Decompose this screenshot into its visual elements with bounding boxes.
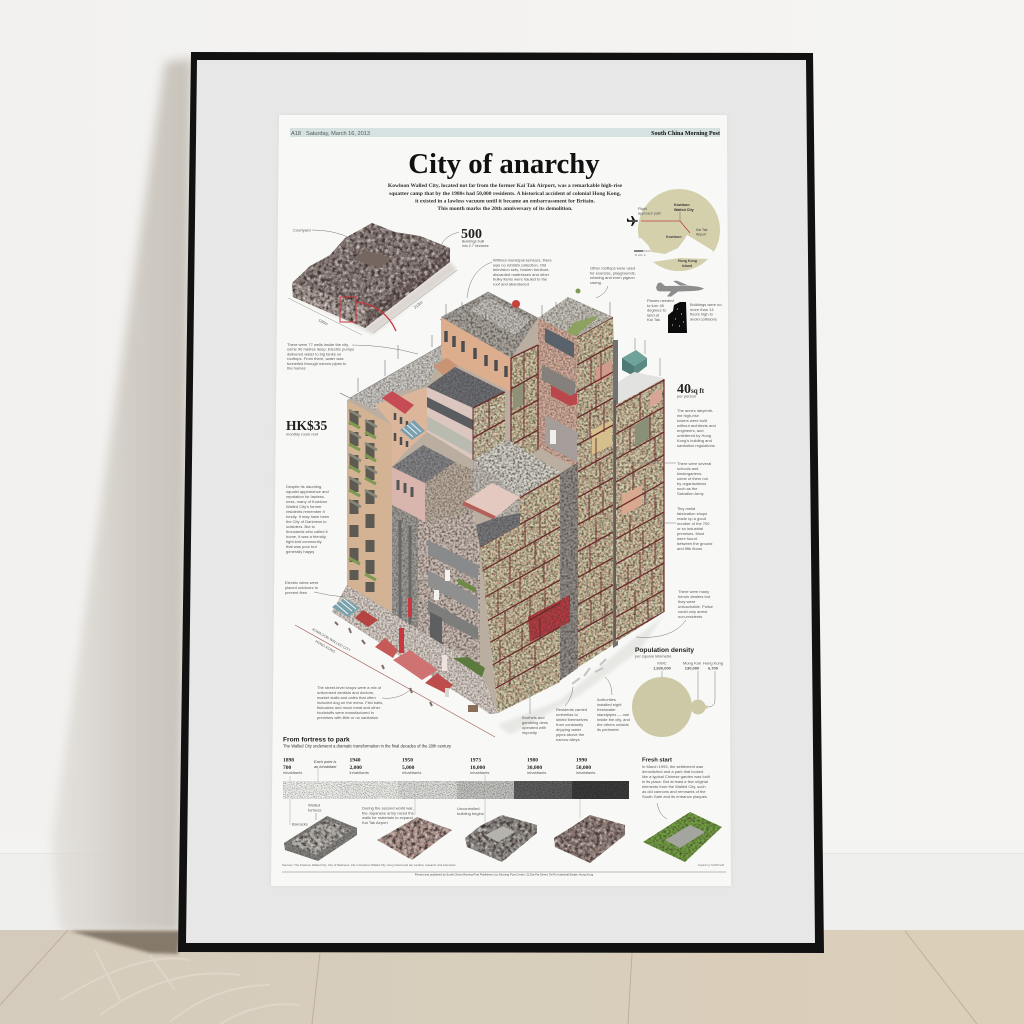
- note: community: reputation for lawless-: [286, 494, 326, 499]
- stat: 40 sq ft: 40: [677, 382, 691, 397]
- aerial block illustration: [288, 223, 457, 335]
- brick peach corner: [433, 358, 458, 376]
- note: towers: Kong's building and: [677, 438, 712, 443]
- fresh start text: elements from the Walled City, such: [642, 784, 706, 789]
- note: metal shops: between the ground: [677, 541, 712, 546]
- note: heroin dealers: untouchable. Police: [678, 604, 714, 609]
- left rooftop parapet: [350, 345, 442, 410]
- note: umbrellas: [556, 687, 588, 742]
- note: wells: funnelled through narrow pipes to: [287, 361, 347, 366]
- stat: 500 buildings: [441, 227, 489, 248]
- note: towers: without architects and: [677, 423, 716, 428]
- population density chart: 130,000: [685, 666, 700, 670]
- timeline labels: 5,000: [402, 765, 415, 771]
- cutaway cells: upper small: [473, 392, 505, 460]
- red locator square and arc: [340, 297, 396, 331]
- block stage 1990: [554, 815, 625, 863]
- note: building height limit: avoid collisions: [690, 316, 717, 321]
- intro paragraph: it existed in a lawless vacuum until it became an embarrassment for Britain.: [415, 198, 595, 204]
- street-level shops and awnings: [332, 585, 498, 714]
- population density chart: 1,930,000: [653, 666, 672, 670]
- note: umbrellas: from constantly: [556, 722, 583, 727]
- locator map: Kowloon: [674, 203, 690, 207]
- timeline labels: 1990: [576, 758, 587, 764]
- note: metal shops: [656, 506, 712, 551]
- dark grey tin roof block: [427, 367, 505, 460]
- note: umbrellas: umbrellas to: [556, 712, 579, 717]
- note: metal shops: Tiny metal: [677, 506, 695, 511]
- locator map: Airport: [696, 232, 706, 236]
- locator map: [627, 188, 722, 275]
- mid grey-roof block: [392, 439, 560, 547]
- fresh start text: South Gate and its entrance plaques: [642, 794, 707, 799]
- note: rooftop rubbish: bulky items were hauled to the: [493, 276, 548, 282]
- note: schools: such as the: [677, 486, 698, 491]
- note: rooftop rubbish: television sets, broken furniture,: [493, 267, 549, 272]
- note: wells: the homes: [287, 366, 306, 370]
- note: street-level shops: The street-level shops were a mix of: [317, 685, 382, 690]
- note: metal shops: number of the 700: [677, 521, 710, 526]
- note: towers: ine high-rise: [677, 413, 700, 418]
- note: metal shops: fabrication shops: [677, 511, 707, 516]
- timeline labels: 30,000: [527, 765, 542, 771]
- note: towers: unfettered by Hong: [677, 433, 711, 438]
- note: standpipes: the others outside: [597, 722, 630, 727]
- wooden floor: [0, 930, 1024, 1024]
- facade: rear left tower: [441, 317, 511, 392]
- note: schools: schools and: [677, 466, 698, 471]
- gap between towers: [613, 340, 618, 648]
- note: rooftop rubbish: roof and abandoned: [493, 281, 529, 286]
- note: electric wires: Electric wires were: [285, 580, 319, 585]
- note: community: home, it was a friendly,: [286, 534, 327, 539]
- fresh start text: In March 1993, the settlement was: [642, 764, 703, 769]
- block stage 1973: building begins: [457, 811, 484, 816]
- title: City of anarchy: [408, 148, 600, 180]
- note: standpipes: Authorities: [597, 697, 616, 702]
- timeline labels: inhabitants: [576, 770, 595, 775]
- timeline labels: inhabitants: [470, 770, 489, 775]
- note: community: tight-knit community: [286, 539, 322, 544]
- header band: South China Morning Post: [651, 131, 720, 137]
- rear towers rooftops: [440, 288, 613, 358]
- boundary lines and labels: HONG KONG: [314, 639, 336, 654]
- note: street-level shops: unlicensed dentists and doctors,: [317, 690, 374, 695]
- locator map: 0 km 1: [635, 253, 646, 257]
- header band: [290, 128, 720, 137]
- note: community: squalid appearance and: [286, 489, 329, 494]
- pink middle block: [375, 387, 427, 467]
- locator map: Kowloon: [666, 235, 682, 239]
- bubble circles: [632, 671, 715, 737]
- note: rooftops use: [590, 266, 636, 298]
- locator map: Flight: [638, 207, 647, 211]
- block stage 1973: Uncontrolled: [457, 806, 479, 811]
- timeline labels: 2,000: [350, 765, 362, 771]
- note: towers: The area's labyrinth-: [677, 408, 714, 413]
- block stage 1973: [457, 806, 537, 862]
- note: umbrellas: pipes above the: [556, 732, 585, 737]
- sources and footer: Sources: The Kowloon Walled City; City of Darkness: Life in Kowloon Walled City; Greg Girard and Ian Lambot; research and interviews: [282, 863, 456, 867]
- note: schools: Salvation Army: [677, 491, 704, 496]
- note: street-level shops: foodstuffs were manufactured in: [317, 710, 374, 715]
- note: schools: [632, 461, 711, 496]
- boundary lines and labels: [295, 625, 495, 737]
- note: community: generally happy: [286, 549, 314, 554]
- stat: 40 sq ft: sq ft: [691, 387, 705, 395]
- note: community: thousands who called it: [286, 529, 328, 534]
- block stage 1898: fortress: [308, 808, 321, 812]
- skirting board: [0, 839, 1024, 931]
- timeline labels: 50,000: [576, 765, 591, 771]
- scattered debris at base: [572, 659, 606, 684]
- note: community: Despite its daunting,: [286, 484, 322, 489]
- section heading: from fortress to park: From fortress to park: [283, 736, 350, 744]
- note: community: that was poor but: [286, 544, 318, 549]
- icon: grey airliner: [656, 281, 704, 297]
- timeline labels: an inhabitant: [314, 764, 337, 769]
- note: standpipes: installed eight: [597, 702, 622, 707]
- lower facade with balconies and laundry: [392, 505, 480, 702]
- locator map: Island: [682, 264, 692, 268]
- note: wells: rooftops. From there, water was: [287, 356, 343, 361]
- note: metal shops: and fifth floors: [677, 546, 702, 551]
- note: wells: There were 77 wells inside the city,: [287, 342, 349, 347]
- note: heroin dealers: they were: [678, 599, 696, 604]
- timeline labels: inhabitants: [527, 770, 546, 775]
- note: rooftop rubbish: [467, 258, 552, 298]
- note: electric wires: prevent fires: [285, 590, 307, 595]
- population dot density strip: [283, 768, 629, 826]
- note: towers: sanitation regulations: [677, 443, 715, 448]
- note: rooftops use: for exercise, playgrounds,: [590, 270, 636, 275]
- intro paragraph: Kowloon Walled City, located not far from the former Kai Tak Airport, was a remarkable high-rise: [388, 183, 623, 189]
- cutaway cells: lower block: [480, 473, 570, 713]
- cutaway cells: middle tower: [577, 317, 613, 668]
- courtyard label: [293, 228, 352, 239]
- note: schools: There were several: [677, 461, 711, 466]
- stat: 500 buildings: 500: [461, 227, 482, 242]
- note: heroin dealers: heroin dealers but: [678, 594, 711, 599]
- timeline labels: 1898: [283, 758, 294, 764]
- note: rooftop rubbish: discarded mattresses and other: [493, 272, 550, 277]
- timeline labels: 700: [283, 765, 292, 771]
- stat: 500 buildings: Buildings built: [462, 240, 484, 244]
- locator map: Walled City: [674, 208, 695, 212]
- note: rooftop rubbish: Without municipal services, there: [493, 258, 552, 262]
- timeline labels: 10,000: [470, 765, 485, 771]
- header band: A18: [291, 131, 301, 137]
- timeline labels: inhabitants: [350, 770, 369, 775]
- note: umbrellas: dripping water: [556, 727, 582, 732]
- block stage 1950: [362, 806, 452, 860]
- note: standpipes: freshwater: [597, 707, 616, 712]
- cutaway cells: rear left tower: [511, 345, 538, 470]
- note: brothels: impunity: [522, 730, 537, 735]
- fresh start text: [642, 758, 711, 799]
- locator map: Kai Tak: [696, 228, 708, 232]
- faded pale street ground: [498, 615, 664, 735]
- note: planes: to turn 45: [647, 303, 665, 308]
- note: rooftop rubbish: was no rubbish collection. Old: [493, 262, 546, 267]
- population density chart: Population density: [635, 647, 694, 654]
- note: towers: engineers, and: [677, 428, 703, 433]
- note: community: fondly. It may have been: [286, 514, 329, 519]
- population density chart: per square kilometre: [635, 654, 672, 658]
- note: heroin dealers: [636, 589, 714, 637]
- stat: 40 sq ft: per person: [677, 394, 696, 398]
- locator map: approach path: [638, 212, 661, 216]
- note: towers: towers were built: [677, 418, 708, 423]
- block stage 1950: walls for materials to expand: [362, 815, 413, 820]
- note: street-level shops: market stalls and cafes that often: [317, 695, 376, 700]
- header band: Saturday, March 16, 2013: [306, 131, 370, 137]
- sources and footer: Printed and published by South China Morning Post Publishers Ltd, Morning Post Centre, 22 Dai Fat Street, Tai Po Industrial Estate, Hong Kong: [415, 872, 594, 876]
- note: schools: some of them run: [677, 476, 708, 481]
- right tower roof: [618, 372, 664, 405]
- service alley: [558, 462, 578, 682]
- stat: monthly rent: monthly room rent: [286, 432, 319, 436]
- timeline labels: [283, 758, 595, 775]
- population density chart: Mong Kok: [683, 660, 701, 666]
- note: wells: delivered water to big tanks on: [287, 351, 341, 356]
- fresh start text: in its place. But at least a few original: [642, 779, 708, 784]
- block stage park: [643, 803, 722, 862]
- note: schools: by organisations: [677, 481, 706, 486]
- note: community: the City of Darkness to: [286, 519, 327, 524]
- intro paragraph: squatter camp that by the 1980s had 50,000 residents. A historical accident of colonial Hong Kong,: [389, 191, 622, 197]
- section heading: from fortress to park: The Walled City underwent a dramatic transformation in the final decades of the 20th century: [283, 744, 452, 748]
- boundary lines and labels: KOWLOON WALLED CITY: [312, 627, 352, 653]
- note: heroin dealers: There were many: [678, 589, 709, 594]
- timeline labels: 1940: [350, 758, 361, 764]
- block stage 1950: the Japanese army razed the: [362, 810, 415, 815]
- note: brothels: [522, 680, 548, 735]
- base silhouette: [332, 292, 664, 714]
- facade: rear middle tower: [538, 318, 577, 468]
- note: community: Walled City's former: [286, 504, 322, 509]
- block stage 1898: [284, 802, 357, 861]
- note: heroin dealers: could only arrest: [678, 609, 708, 614]
- sources and footer: [282, 863, 726, 876]
- note: standpipes: inside the city, and: [597, 717, 630, 722]
- note: brothels: operated with: [522, 725, 546, 730]
- green rooftop shack: [622, 338, 660, 376]
- timeline labels: Each point is: [314, 759, 336, 764]
- note: metal shops: were found: [677, 536, 697, 541]
- note: street-level shops: premises with little or no sanitation: [317, 715, 378, 720]
- note: street-level shops: fishcakes and mock meat and other: [317, 705, 381, 710]
- left tan facade with balconies: [347, 400, 392, 612]
- timeline labels: 1973: [470, 758, 481, 764]
- note: planes: degrees to: [647, 308, 667, 313]
- timeline labels: 1980: [527, 758, 538, 764]
- locator map: Hong Kong: [678, 259, 697, 263]
- timeline labels: inhabitants: [402, 770, 421, 775]
- stat: monthly rent: HK$35: [286, 418, 328, 433]
- aerial block illustration: 213m: [413, 299, 424, 310]
- note: electric wires: [285, 580, 345, 597]
- note: planes: land at: [647, 312, 660, 317]
- fresh start text: like a typical Chinese garden was built: [642, 774, 711, 779]
- note: standpipes: its perimeter: [597, 727, 620, 732]
- note: umbrellas: Residents carried: [556, 707, 587, 712]
- frame shadow on wall: [52, 58, 192, 932]
- note: brothels: gambling dens: [522, 720, 548, 725]
- intro paragraph: This month marks the 20th anniversary of its demolition.: [437, 206, 573, 212]
- note: standpipes: [597, 677, 630, 732]
- note: community: residents remember it: [286, 509, 326, 514]
- note: building height limit: more than 14: [690, 307, 714, 312]
- note: metal shops: or so industrial: [677, 526, 703, 531]
- note: rooftops use: relaxing and even pigeon: [590, 275, 635, 280]
- block stage 1950: During the second world war,: [362, 806, 414, 810]
- stat: 500 buildings: into 2.7 hectares: [462, 244, 489, 248]
- population density chart: Hong Kong: [703, 660, 723, 666]
- note: metal shops: made up a good: [677, 516, 706, 521]
- icon: black building silhouette: [668, 302, 687, 333]
- population density chart: 6,700: [708, 666, 719, 670]
- fresh start text: as old cannons and remnants of the: [642, 789, 706, 794]
- note: wells: some 90 metres deep. Electric pumps: [287, 347, 354, 352]
- note: street-level shops: included dog on the menu. Fish balls,: [317, 700, 383, 705]
- section heading: from fortress to park: [283, 736, 452, 748]
- note: standpipes: standpipes — one: [597, 712, 630, 717]
- sources and footer: Graphic by SCMP staff: [698, 863, 724, 867]
- main cutaway building illustration: [332, 288, 664, 735]
- note: community: ness, many of Kowloon: [286, 499, 327, 504]
- cutaway cells: right tower: [615, 379, 664, 642]
- note: planes: Planes needed: [647, 298, 674, 303]
- timeline labels: 1950: [402, 758, 413, 764]
- note: building height limit: Buildings were no: [690, 302, 722, 307]
- note: street-level shops: [317, 685, 412, 720]
- population density chart: KWC: [657, 660, 667, 666]
- courtyard label: Courtyard: [293, 228, 311, 232]
- black picture frame: [178, 52, 824, 953]
- note: schools: kindergartens,: [677, 471, 702, 476]
- note: metal shops: premises. Most: [677, 531, 705, 536]
- note: umbrellas: narrow alleys: [556, 737, 580, 742]
- note: rooftops use: racing: [590, 280, 601, 285]
- block stage 1950: Kai Tak Airport: [362, 820, 389, 825]
- note: rooftops use: Other rooftops were used: [590, 266, 635, 270]
- note: electric wires: placed outdoors to: [285, 585, 319, 590]
- timeline labels: inhabitants: [283, 770, 302, 775]
- fresh start text: demolished and a park that looked: [642, 769, 703, 774]
- note: building height limit: floors high to: [690, 312, 714, 317]
- fresh start text: Fresh start: [642, 758, 672, 764]
- note: community: outsiders. But to: [286, 524, 316, 529]
- note: umbrellas: shield themselves: [556, 717, 588, 722]
- icon: plane small: [627, 216, 638, 226]
- note: heroin dealers: non-residents: [678, 614, 702, 619]
- block stage 1898: Barracks: [292, 822, 308, 826]
- note: wells: [287, 342, 418, 370]
- note: planes: Kai Tak: [647, 317, 660, 322]
- population density chart: [632, 647, 723, 737]
- note: brothels: Brothels and: [522, 715, 544, 720]
- block stage 1898: Walled: [308, 802, 320, 808]
- grey mount: [186, 60, 815, 943]
- poster sheet: [271, 115, 731, 886]
- stat: 40 sq ft: [677, 382, 705, 398]
- aerial block illustration: 126m: [318, 317, 329, 327]
